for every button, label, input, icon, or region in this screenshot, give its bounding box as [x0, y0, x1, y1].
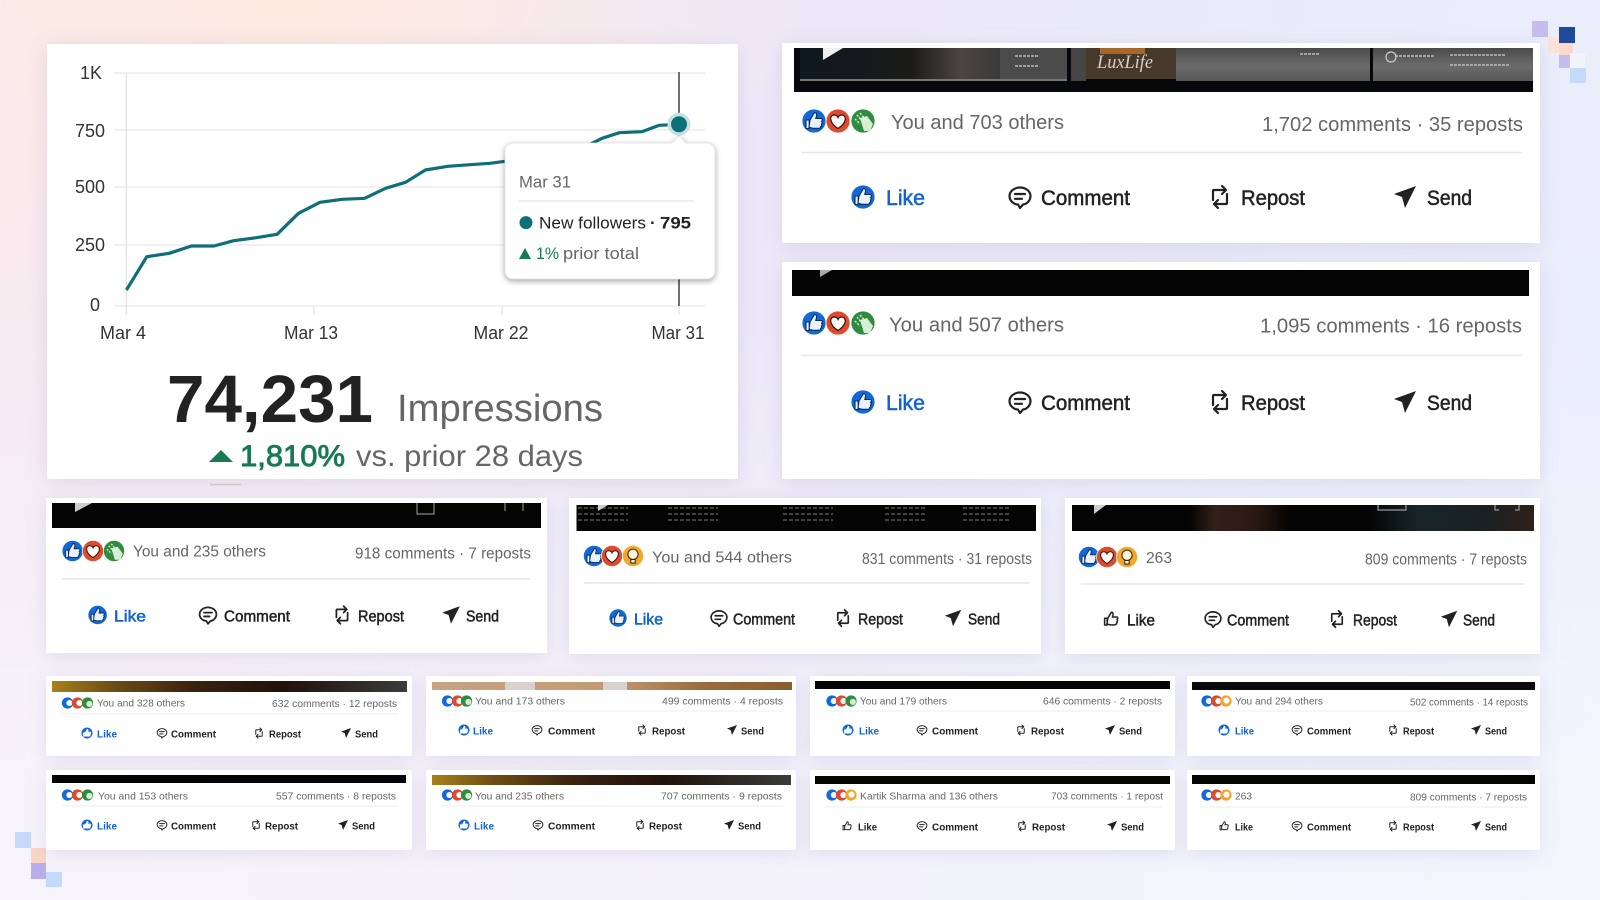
action row: Repost: [652, 726, 685, 738]
reactions: [1201, 695, 1232, 707]
action row: Comment: [1307, 726, 1351, 738]
action row: Repost: [1353, 612, 1397, 630]
action row: Like: [97, 729, 117, 741]
action row: Like: [858, 822, 877, 834]
panel: post 153 others: [46, 770, 412, 850]
text: comments and reposts: 502 comments · 14 reposts: [1410, 697, 1528, 709]
action row: Like: [859, 726, 879, 738]
panel: post 263 small: [1187, 770, 1540, 850]
panel: post 173 others: [426, 676, 796, 756]
video thumbnail strip: [1192, 775, 1535, 784]
chart: new followers line chart: 750: [75, 121, 105, 141]
text: comments and reposts: 831 comments · 31 reposts: [862, 551, 1032, 568]
action row: Send: [1427, 392, 1472, 415]
text: reaction count: You and 153 others: [98, 791, 188, 803]
action row: [1105, 611, 1495, 630]
action row: Send: [968, 612, 1000, 628]
video thumbnail strip: [52, 681, 407, 692]
chart: new followers line chart: [75, 63, 705, 343]
action row: Repost: [1241, 392, 1305, 415]
text: reaction count: You and 544 others: [652, 550, 792, 566]
action row: Repost: [1031, 726, 1064, 738]
action row: Repost: [649, 821, 682, 833]
reactions: [1201, 789, 1232, 801]
video thumbnail strip: [1192, 682, 1535, 690]
action row: Comment: [1041, 187, 1130, 210]
text: comments and reposts: 632 comments · 12 reposts: [272, 698, 397, 710]
action row: Send: [1427, 187, 1472, 210]
tooltip: Mar 31: [505, 136, 715, 279]
action row: Repost: [1403, 726, 1434, 738]
action row: Like: [886, 392, 925, 415]
chart: new followers line chart: 1K: [80, 63, 102, 83]
action row: [88, 605, 499, 626]
action row: [81, 819, 375, 833]
video thumbnail strip: [815, 776, 1170, 784]
text: comments and reposts: 1,702 comments · 35 reposts: [1262, 114, 1523, 136]
action row: Send: [1463, 612, 1495, 630]
text: reaction count: 263: [1146, 550, 1172, 567]
action row: [1218, 724, 1507, 738]
decorative squares: top right: [1532, 21, 1586, 83]
action row: Send: [355, 729, 378, 741]
action row: Like: [1235, 726, 1254, 738]
reactions: [826, 789, 857, 801]
action row: Comment: [171, 729, 216, 741]
text: comments and reposts: 707 comments · 9 reposts: [661, 791, 782, 803]
action row: Send: [738, 821, 761, 833]
tooltip: Mar 31: 1%: [536, 244, 559, 263]
text: reaction count: You and 179 others: [860, 696, 947, 708]
big stat: impressions: [167, 362, 603, 437]
stat change: vs prior 28 days: vs. prior 28 days: [356, 440, 583, 473]
text: comments and reposts: 918 comments · 7 reposts: [355, 546, 531, 562]
chart: new followers line chart: Mar 22: [474, 323, 528, 343]
action row: [842, 724, 1142, 738]
text: reaction count: You and 294 others: [1235, 696, 1323, 708]
panel: post Kartik Sharma and 136 others: [810, 770, 1175, 850]
video thumbnail strip: [52, 775, 406, 783]
reactions: [583, 545, 644, 567]
text: comments and reposts: 809 comments · 7 reposts: [1410, 792, 1527, 804]
action row: [851, 185, 1472, 210]
action row: Like: [97, 821, 117, 833]
reactions: [62, 789, 93, 801]
action row: Send: [1485, 726, 1507, 738]
reactions: [442, 789, 472, 801]
action row: Comment: [171, 821, 216, 833]
stat change: vs prior 28 days: [209, 440, 583, 473]
action row: Like: [473, 726, 493, 738]
video thumbnail strip: [794, 48, 1533, 92]
action row: Repost: [1403, 822, 1434, 834]
action row: Like: [1127, 612, 1155, 630]
action row: Comment: [548, 821, 595, 833]
action row: Repost: [1241, 187, 1305, 210]
video thumbnail strip: [52, 503, 541, 528]
chart: new followers line chart: 250: [75, 235, 105, 255]
text: comments and reposts: 557 comments · 8 reposts: [276, 791, 396, 803]
video thumbnail strip: [576, 505, 1036, 531]
panel: post 507 others: [782, 262, 1540, 479]
action row: Repost: [358, 608, 404, 626]
action row: [458, 724, 764, 738]
text: comments and reposts: 499 comments · 4 reposts: [662, 696, 783, 708]
tooltip: Mar 31: ·: [650, 214, 656, 232]
panel: post 179 others: [810, 676, 1175, 756]
action row: Comment: [1307, 822, 1351, 834]
action row: Send: [741, 726, 764, 738]
text: reaction count: You and 703 others: [891, 112, 1064, 134]
action row: Like: [114, 608, 146, 626]
video thumbnail strip: [432, 775, 791, 785]
action row: Send: [1121, 822, 1144, 834]
tooltip: Mar 31: 795: [660, 214, 691, 232]
action row: Comment: [224, 608, 291, 626]
chart: new followers line chart: Mar 13: [284, 323, 338, 343]
text: reaction count: You and 235 others: [133, 544, 266, 560]
action row: Repost: [265, 821, 298, 833]
panel: post 294 others: [1187, 676, 1540, 756]
action row: [609, 609, 1000, 628]
tooltip: Mar 31: Mar 31: [519, 172, 571, 192]
text: comments and reposts: 646 comments · 2 reposts: [1043, 696, 1162, 708]
text: reaction count: You and 507 others: [889, 314, 1064, 336]
video thumbnail strip: [792, 270, 1529, 296]
text: reaction count: You and 235 others: [475, 791, 564, 803]
action row: [851, 390, 1472, 415]
panel: post 328 others: [46, 676, 412, 756]
panel: post 544 others: [569, 498, 1041, 654]
reactions: [62, 540, 125, 562]
reactions: [62, 697, 93, 709]
tooltip: Mar 31: New followers: [539, 214, 646, 232]
panel: followers chart and impressions: [47, 44, 738, 479]
action row: Send: [466, 608, 499, 626]
action row: Like: [1235, 822, 1253, 834]
chart: new followers line chart: 0: [90, 295, 100, 315]
panel: post 263 reactions: [1065, 498, 1540, 654]
action row: Repost: [858, 612, 903, 628]
action row: Comment: [548, 726, 595, 738]
video thumbnail strip: [432, 682, 792, 690]
reactions: [442, 695, 472, 707]
text: reaction count: You and 328 others: [97, 698, 185, 710]
reactions: [1078, 546, 1138, 568]
reactions: [826, 695, 857, 707]
reactions: [802, 311, 875, 335]
big stat: impressions: Impressions: [397, 388, 603, 430]
panel: post 235 others small: [426, 770, 796, 850]
text: reaction count: 263: [1235, 791, 1252, 803]
stat change: vs prior 28 days: 1,810%: [240, 440, 345, 473]
decorative squares: bottom left: [15, 832, 62, 887]
action row: Comment: [1227, 612, 1289, 630]
video thumbnail strip: [815, 681, 1170, 689]
action row: Comment: [733, 612, 795, 628]
text: comments and reposts: 809 comments · 7 reposts: [1365, 552, 1527, 568]
action row: Comment: [932, 726, 978, 738]
action row: Send: [1485, 822, 1507, 834]
action row: Send: [352, 821, 375, 833]
text: reaction count: You and 173 others: [475, 696, 565, 708]
chart: new followers line chart: Mar 4: [100, 323, 146, 343]
action row: [458, 819, 761, 833]
action row: Repost: [269, 729, 301, 741]
video thumbnail strip: [1072, 505, 1534, 531]
chart: new followers line chart: 500: [75, 177, 105, 197]
action row: Like: [886, 187, 925, 210]
text: reaction count: Kartik Sharma and 136 others: [860, 791, 998, 803]
panel: post 235 others: [46, 498, 547, 653]
action row: Comment: [932, 822, 978, 834]
tooltip: Mar 31: prior total: [563, 244, 639, 263]
action row: Like: [634, 612, 663, 628]
text: comments and reposts: 1,095 comments · 16 reposts: [1260, 316, 1522, 338]
action row: Like: [474, 821, 494, 833]
action row: Repost: [1032, 822, 1065, 834]
action row: Send: [1119, 726, 1142, 738]
chart: new followers line chart: Mar 31: [652, 323, 704, 343]
panel: post 703 others: [782, 43, 1540, 243]
big stat: impressions: 74,231: [167, 362, 373, 437]
action row: [843, 821, 1144, 834]
action row: Comment: [1041, 392, 1130, 415]
text: comments and reposts: 703 comments · 1 repost: [1051, 791, 1163, 803]
action row: [1220, 821, 1507, 834]
action row: [81, 727, 378, 741]
reactions: [802, 109, 875, 133]
video thumbnail strip: LuxLife: [1096, 52, 1153, 73]
